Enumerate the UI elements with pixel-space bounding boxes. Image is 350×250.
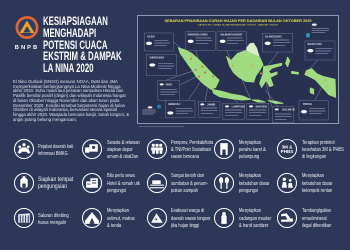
action: swasta & relawan: siapkan dapur (107, 147, 133, 153)
intro paragraph: akhir 2020. Suhu muka laut perairan samudera Hindia dan (13, 88, 123, 93)
intro paragraph: Desember 2020. Kondisi tersebut berpotensi hujan di bulan (13, 103, 125, 108)
action: protokol 3M & PHBS: kesehatan 3M & PHBS (302, 147, 344, 153)
cloud icons (146, 23, 317, 115)
action: kebutuhan dasar: kebutuhan dasar (239, 181, 270, 187)
map title (164, 19, 312, 26)
action: siapkan tempat pengungsian: pengungsian (38, 183, 67, 190)
action: saluran ditebing (14, 208, 69, 228)
map: Indonesia islands (142, 23, 336, 123)
action: sungai: pukan sampah (171, 188, 198, 194)
action: tambang: emas/mineral (302, 216, 327, 222)
intro paragraph: Pasifik bernilai positif (dingin) dan wilayah Indonesia hangat (13, 93, 126, 98)
action: kebutuhan dasar: pengungsi (239, 188, 258, 194)
action: swasta & relawan: Swasta & relawan (107, 140, 140, 146)
panel: rainfall map (137, 15, 339, 124)
region callouts (144, 32, 335, 123)
action: protokol 3M & PHBS: Terapkan protokol (302, 140, 335, 146)
action: kebutuhan dasar (214, 173, 270, 194)
callout region names: BANTEN (256, 105, 267, 109)
action: tambang: ilegal dihentikan (302, 223, 331, 229)
action: kelompok rentan: kelompok rentan (302, 188, 332, 194)
callout region names: SUMATERA UTARA (188, 33, 208, 37)
action: kelompok rentan (277, 173, 333, 194)
title: POTENSI CUACA (43, 38, 107, 52)
action: perahu karet: pelampung (239, 154, 259, 160)
action: saluran ditebing: Saluran ditebing (38, 212, 69, 218)
action: pemprov: rawan bencana (171, 154, 199, 160)
title: EKSTRIM & DAMPAK (43, 49, 122, 63)
callout leader lines (167, 42, 325, 107)
action: menyiapkan selimut: & tenda (107, 223, 121, 229)
action: pejabat daerah: informasi BMKG (38, 151, 68, 157)
action: evakuasi: jika hujan tinggi (171, 223, 199, 229)
action: hotel & rumah: Hotel & rumah utk (107, 181, 140, 187)
title: MENGHADAPI (43, 26, 96, 40)
title: LA NINA 2020 (43, 61, 93, 75)
action: menyiapkan selimut: Menyiapkan (107, 208, 129, 214)
action: siapkan tempat pengungsian: Siapkan tempat (38, 176, 73, 183)
action: menyiapkan selimut (82, 208, 135, 229)
action: hotel & rumah (82, 173, 140, 194)
map title: KATEGORI CURAH HUJAN MENENGAH TINGGI - SANGAT TINGGI (198, 24, 278, 26)
action: hotel & rumah: Bila perlu sewa (107, 173, 135, 179)
callout region names: LAMPUNG (232, 105, 245, 109)
intro paragraph: angin puting beliung mengancam. (13, 117, 77, 122)
action: menyiapkan selimut: selimut, matras (107, 216, 135, 222)
action: masker: Menyiapkan (239, 208, 261, 214)
callout region names: PAPUA (303, 102, 312, 106)
intro paragraph: Oktober di wilayah Indonesia, bervariasi secara spasial (13, 107, 117, 112)
title (43, 14, 122, 75)
title: KESIAPSIAGAAN (43, 14, 108, 28)
map source line (139, 126, 184, 127)
action: tambang: Tambang/galian (302, 208, 331, 214)
action: pemprov: & TNI/Polri Sosialisasi (171, 147, 211, 153)
callout region names: BALI/NTB (282, 107, 295, 111)
action: evakuasi (147, 208, 211, 229)
action: kebutuhan dasar: Menyiapkan (239, 173, 261, 179)
action: perahu karet: perahu karet & (239, 147, 266, 153)
action: kelompok rentan: Menyiapkan (302, 173, 324, 179)
intro paragraph (13, 79, 130, 122)
callout region names: KALIMANTAN BARAT (220, 33, 243, 37)
action: siapkan tempat pengungsian (14, 173, 74, 193)
action: pejabat daerah: Pejabat daerah kati (38, 144, 73, 150)
callout region names: RIAU (166, 83, 172, 87)
action: masker: cadangan masker (239, 216, 272, 222)
callout region names: ACEH (147, 34, 155, 38)
action: evakuasi: daerah rawan longsor (171, 216, 211, 222)
callout region names: MALUKU UTARA (308, 42, 322, 46)
intro paragraph: hingga akhir 2020. Waspada bencana banjir, tanah longsor, & (13, 112, 129, 117)
callout region names: BENGKULU (168, 102, 180, 106)
action: protokol 3M & PHBS: PHBS (281, 149, 293, 154)
action: hotel & rumah: pengungsi (107, 188, 126, 194)
action: sungai: sumbatan & penum- (171, 181, 208, 187)
action: sungai: Sungai bersih dari (171, 173, 204, 179)
action: swasta & relawan (82, 139, 140, 160)
callout region names: JAMBI (207, 103, 216, 107)
action: pejabat daerah (14, 139, 73, 159)
intro paragraph: El Nino Outlook (ENSO) menurut NOAA, BoM dan JMA (13, 79, 118, 84)
action: swasta & relawan: umum & obat2an (107, 154, 138, 160)
logo: BNPB (15, 16, 39, 50)
action: masker: & hand sanitizer (239, 223, 268, 229)
map title: SEBARAN PRAKIRAAN CURAH HUJAN PER DASARIAN BULAN OKTOBER 2020 (164, 19, 312, 23)
action: perahu karet (214, 139, 266, 160)
action: pemprov (147, 139, 214, 160)
callout region names (147, 33, 322, 111)
action: tambang (277, 208, 332, 229)
action: protokol 3M & PHBS (277, 139, 344, 160)
callout region names: SUMATERA BARAT (150, 55, 165, 59)
action: kelompok rentan: kebutuhan dasar (302, 181, 333, 187)
action: pemprov: Pemprov, Pemkab/kota (171, 140, 213, 146)
action: masker (214, 208, 272, 229)
action: sungai (147, 173, 208, 194)
action: perahu karet: Menyiapkan (239, 140, 261, 146)
legend markers (157, 33, 310, 109)
intro paragraph: di bulan Oktober hingga November dan akan turun pada (13, 98, 119, 103)
intro paragraph: memperkirakan berlangsungnya La Nina Moderat hingga (13, 84, 120, 89)
callout region names: SULAWESI BARAT (265, 35, 282, 39)
action: saluran ditebing: harus mengalir (38, 220, 66, 226)
action: protokol 3M & PHBS: 3M & (282, 144, 293, 149)
callout body text lines (142, 29, 332, 119)
action: evakuasi: Evakuasi warga di (171, 208, 204, 214)
action: protokol 3M & PHBS: di lingkungan (302, 154, 326, 160)
